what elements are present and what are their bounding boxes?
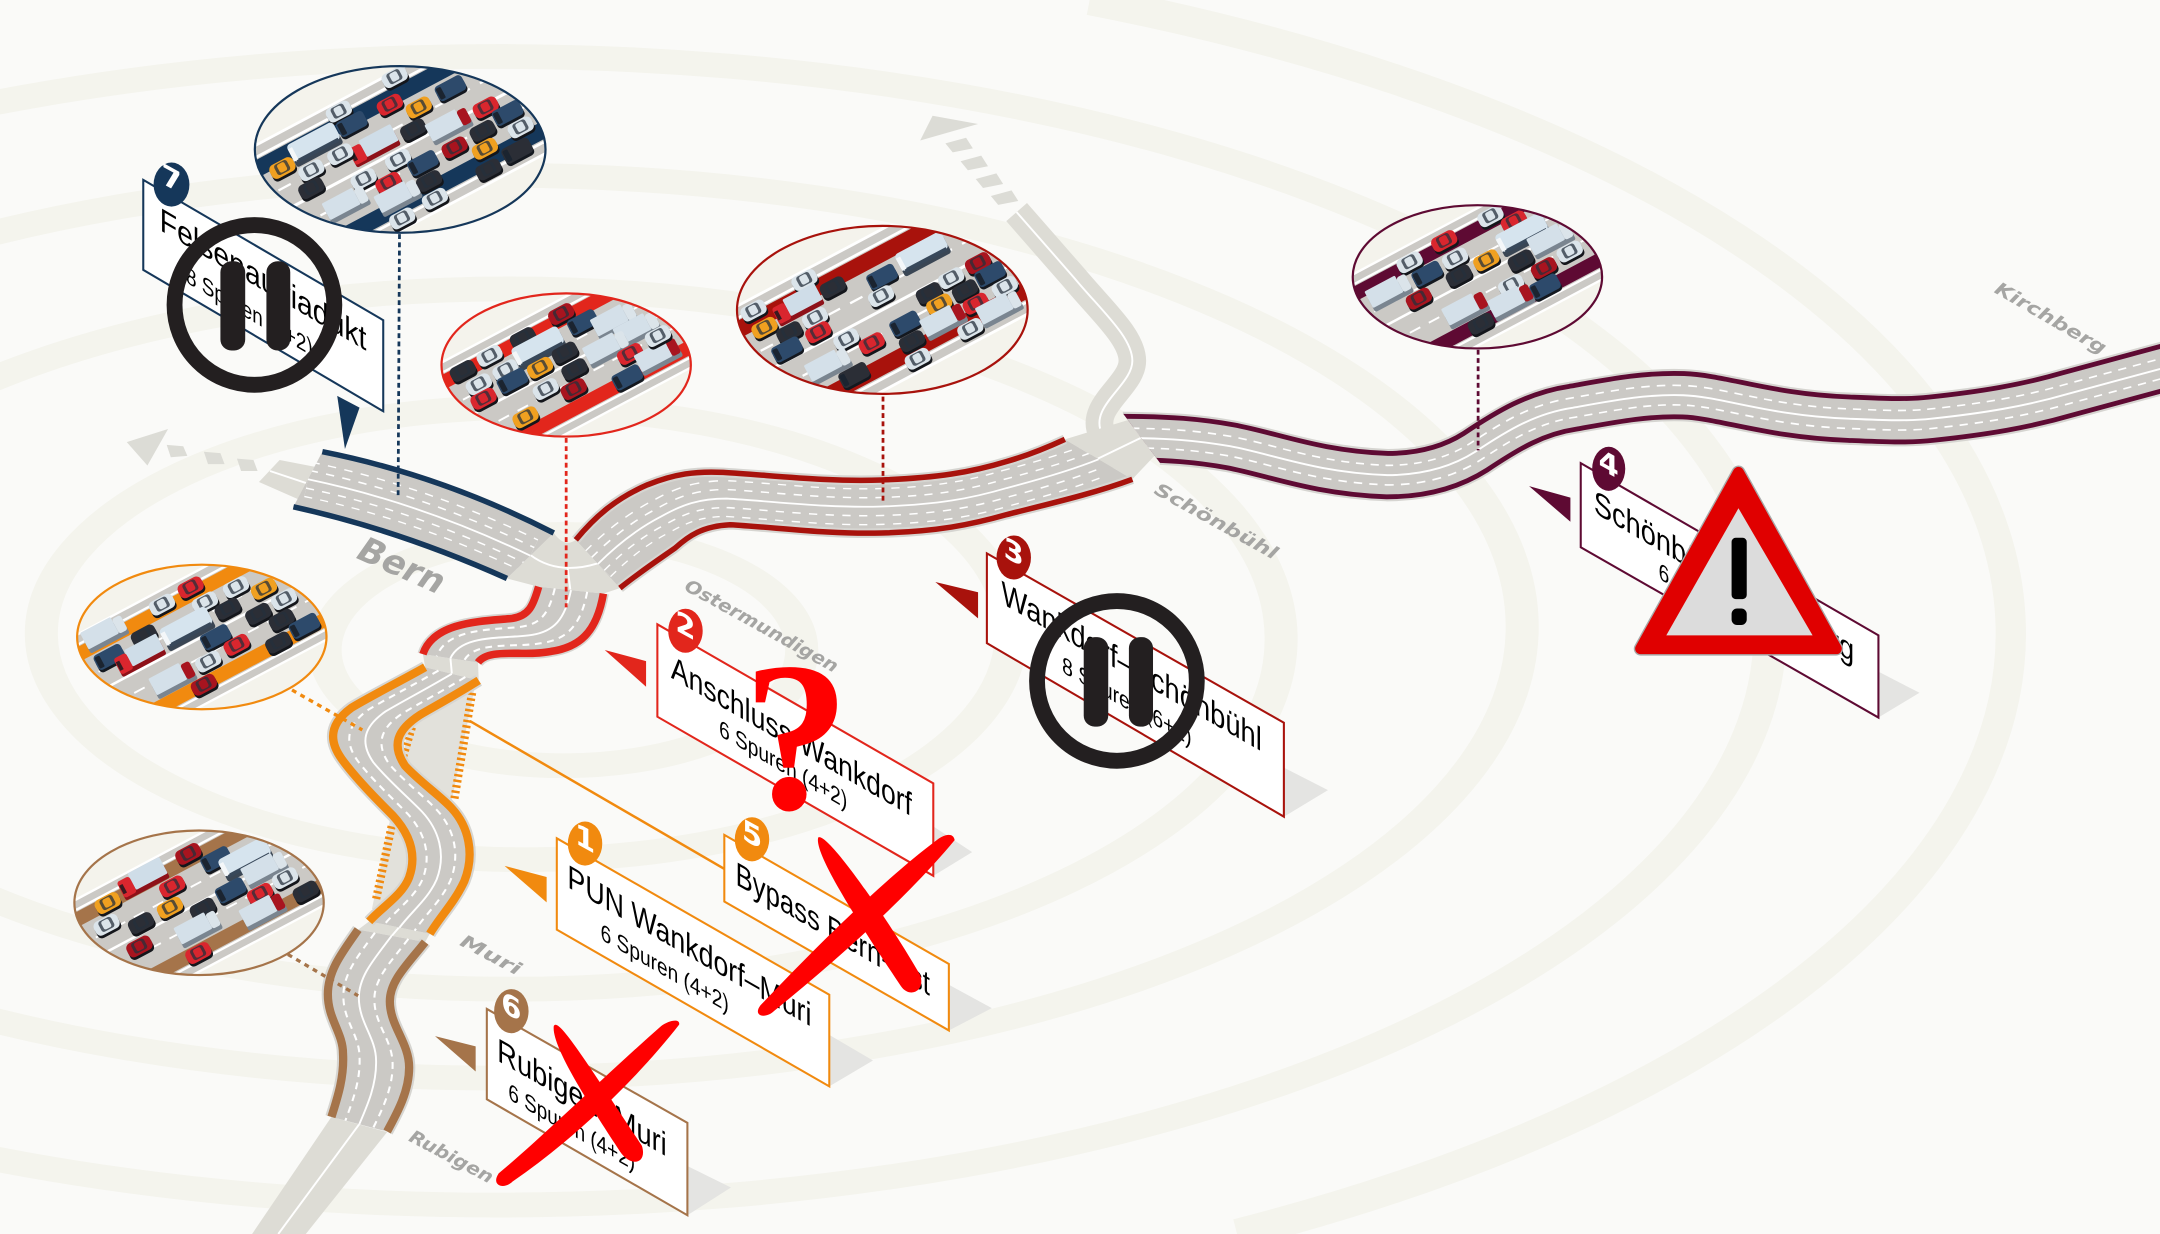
sign 3 lanes: 8 Spuren (6+2) (1062, 652, 1192, 751)
badge 4: 4 (1599, 442, 1619, 487)
badge 5: 5 (742, 813, 762, 857)
road segment 6: Rubigen–Muri (328, 930, 425, 1132)
label: Muri: Muri (456, 931, 526, 981)
sign 2: Anschluss Wankdorf (605, 604, 972, 876)
badge 2 (668, 604, 703, 653)
road network: unbuilt connector sections (127, 116, 1154, 1234)
icon: pause over sign 7 (175, 225, 334, 385)
badge 5 (735, 813, 769, 861)
sign 2 title: Anschluss Wankdorf (671, 648, 912, 824)
arrow: north direction (920, 116, 1018, 205)
road segment 1: PUN Wankdorf–Muri (333, 667, 479, 934)
sign 6 title: Rubigen–Muri (497, 1031, 667, 1164)
leader line: lens 6 (288, 954, 358, 996)
leader line: lens 3 (882, 397, 884, 503)
north branch road (1017, 212, 1132, 466)
sign 5: Bypass Bern-Ost (724, 813, 992, 1030)
sign 3 title: Wankdorf–Schönbühl (1001, 574, 1262, 759)
sign 6: Rubigen–Muri (435, 985, 731, 1215)
sign 5 title: Bypass Bern-Ost (736, 855, 930, 1003)
icon: pause over sign 3 (1037, 601, 1197, 761)
badge 3 (997, 530, 1031, 580)
leader line: lens 1 (292, 690, 362, 730)
place labels (352, 278, 2110, 1188)
shadow 3 (1284, 768, 1328, 817)
road segment 4: Schönbühl–Kirchberg (1116, 366, 2160, 475)
icon: red question mark over sign 2: ? (743, 619, 850, 855)
sign 4 lanes: 6 Spuren (4+2) (1659, 558, 1787, 658)
connector segment 1 to 6 (358, 921, 430, 942)
shadow 2 (933, 826, 972, 876)
stub road west of Bern (259, 460, 322, 501)
badge 3: 3 (1004, 530, 1024, 575)
label: Ostermundigen: Ostermundigen (681, 575, 842, 677)
sign 7: Felsenauviadukt (143, 157, 383, 449)
badge 1: 1 (575, 817, 595, 861)
badge 4 (1592, 442, 1625, 491)
road segment 2: Anschluss Wankdorf (423, 587, 603, 662)
shadow 6 (687, 1166, 731, 1215)
sign 7 lanes: 8 Spuren (6+2) (186, 262, 313, 362)
leader line: lens 4 (1477, 350, 1479, 450)
label: Rubigen: Rubigen (405, 1126, 497, 1188)
badge 1 (568, 817, 602, 866)
leader line: lens 7 (398, 234, 399, 497)
sign 1 title: PUN Wankdorf–Muri (568, 857, 811, 1034)
icon: red cross over sign 5 (758, 835, 955, 1016)
lens 7: traffic on Felsenauviadukt (254, 65, 547, 234)
connector Schönbühl (1065, 420, 1154, 479)
label: Kirchberg: Kirchberg (1991, 278, 2110, 359)
sign 1 lanes: 6 Spuren (4+2) (601, 919, 729, 1018)
badge 7 (154, 157, 189, 207)
badge 6: 6 (501, 985, 521, 1029)
bypass road under segment 1 (372, 684, 475, 909)
connector segment 2 to 1 (423, 654, 479, 680)
lens 3: traffic on Wankdorf–Schönbühl (736, 224, 1029, 395)
shadow 1 (829, 1035, 873, 1086)
road segment 3: Wankdorf–Schönbühl (576, 439, 1132, 588)
leader line: bypass to sign 5 (470, 721, 725, 869)
sign 3: Wankdorf–Schönbühl (935, 530, 1328, 817)
road south of Rubigen (252, 1117, 387, 1234)
road segment 7: Felsenauviadukt (293, 452, 554, 578)
pointer 7 (337, 396, 360, 449)
label: Schönbühl: Schönbühl (1151, 479, 1282, 565)
lens 1: traffic on PUN Wankdorf–Muri (76, 564, 328, 710)
sign 7 title: Felsenauviadukt (160, 200, 366, 358)
badge 7: 7 (161, 157, 182, 202)
sign 4: Schönbühl–Kirchberg (1529, 442, 1919, 718)
sign 6 lanes: 6 Spuren (4+2) (508, 1079, 635, 1177)
leader line: lens 2 (565, 438, 567, 607)
shadow 4 (1878, 672, 1919, 718)
label: Bern: Bern (352, 529, 451, 603)
lens 6: traffic on Rubigen–Muri (73, 829, 325, 976)
sign 2 lanes: 6 Spuren (4+2) (719, 715, 847, 815)
sign 4 title: Schönbühl–Kirchberg (1594, 483, 1854, 670)
badge 6 (494, 985, 529, 1033)
lens 2: traffic on Anschluss Wankdorf (440, 292, 692, 438)
arrow: west direction (127, 429, 258, 471)
sign 1: PUN Wankdorf–Muri (505, 817, 873, 1086)
connector Bern junction (507, 533, 620, 594)
icon: red cross over sign 6 (496, 1021, 679, 1186)
badge 2: 2 (675, 604, 696, 649)
lens 4: traffic on Schönbühl–Kirchberg (1352, 204, 1604, 350)
shadow 5 (949, 985, 992, 1030)
icon: warning triangle over sign 4 (1641, 472, 1836, 649)
